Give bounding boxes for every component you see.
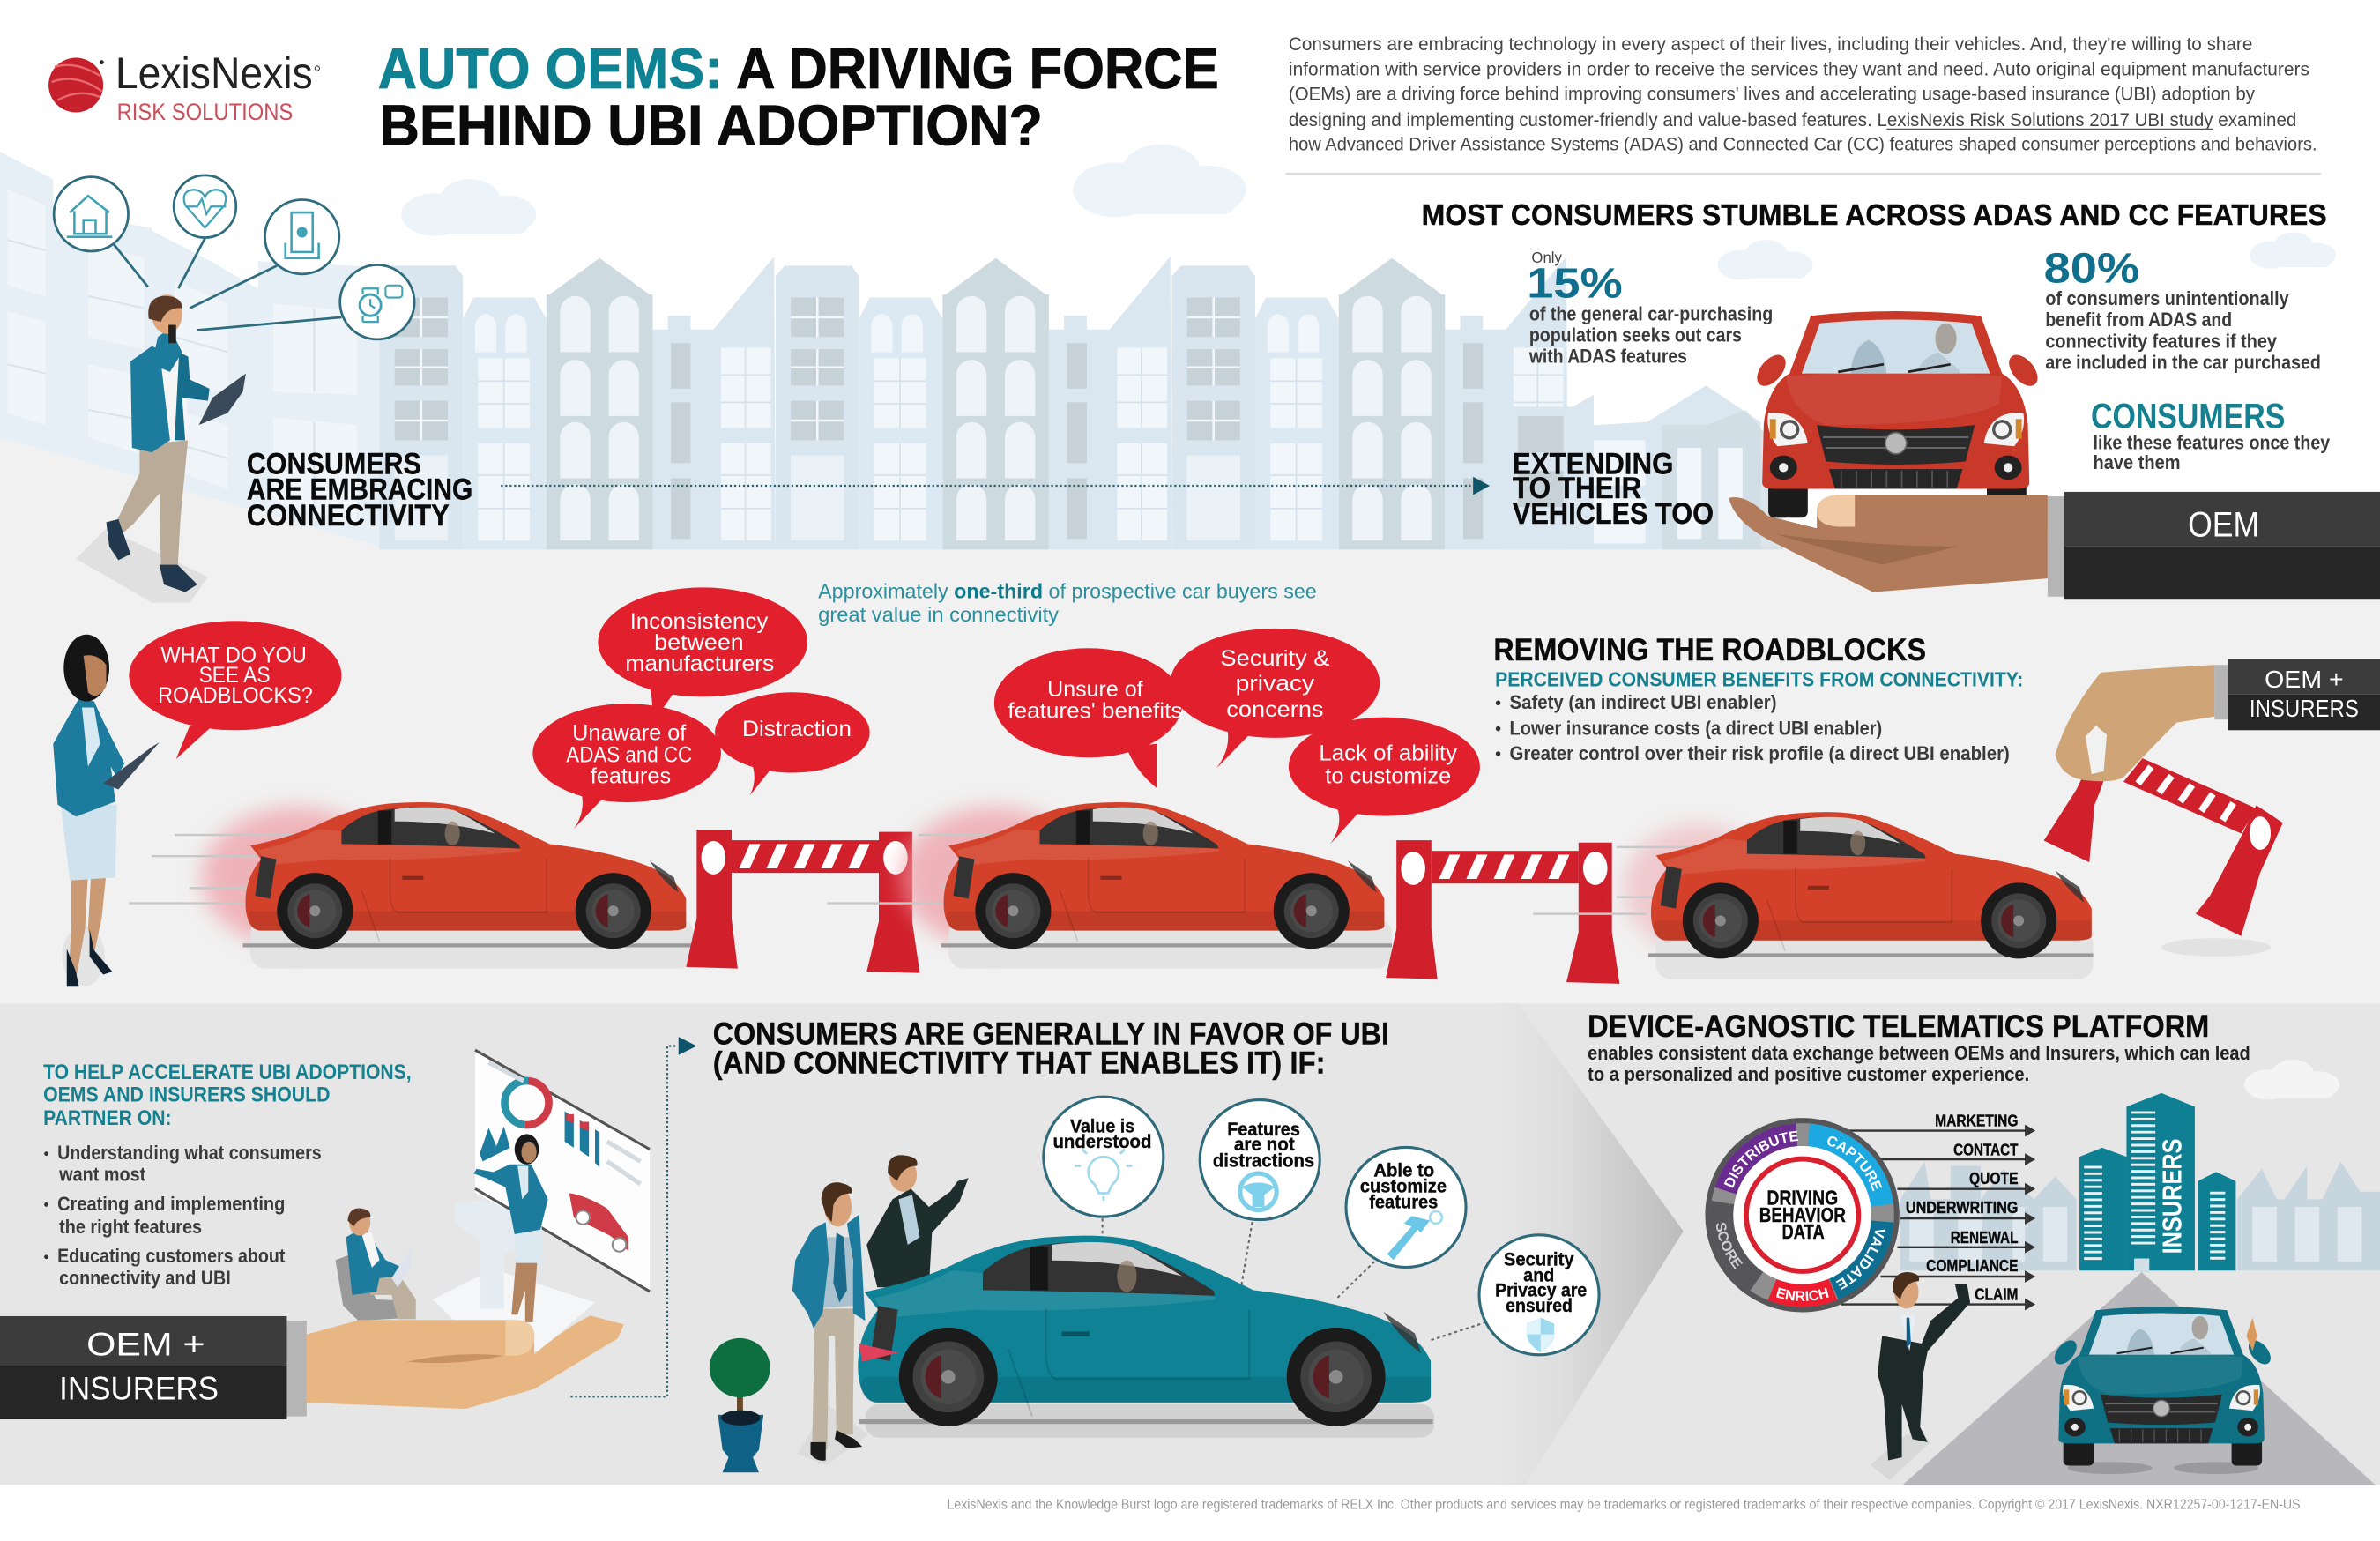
bubble: what do you see as roadblocks: ROADBLOCKS?	[158, 683, 313, 708]
chart: driving behavior data ring: DISTRIBUTE	[1724, 1130, 1798, 1188]
callout: value is understood: understood	[1053, 1131, 1151, 1152]
teal car on road	[2050, 1306, 2275, 1474]
callout: security and privacy ensured: ensured	[1506, 1295, 1573, 1316]
stat: 80 percent: of consumers unintentionally	[2045, 287, 2289, 309]
list: perceived benefits: Lower insurance costs (a direct UBI enabler)	[1509, 717, 1882, 739]
stat: 80 percent: 80%	[2044, 244, 2139, 292]
barrier one	[686, 830, 919, 973]
title: AUTO OEMS:	[378, 37, 723, 100]
list: perceived benefits: Safety (an indirect UBI enabler)	[1509, 691, 1777, 713]
stat: 15 percent	[1527, 249, 1773, 368]
logo: LexisNexis Risk Solutions: RISK SOLUTIONS	[117, 99, 293, 125]
stat: 15 percent: population seeks out cars	[1529, 324, 1742, 346]
output arrows with labels: MARKETING	[1935, 1113, 2018, 1130]
stat: 15 percent: Only	[1531, 249, 1562, 266]
chart: driving behavior data ring: CAPTURE	[1827, 1136, 1883, 1192]
illustration: OEM and insurers hand with text	[0, 1315, 624, 1419]
text: one-third of buyers see value: great value in connectivity	[818, 603, 1059, 626]
bubble: distraction: Distraction	[742, 717, 852, 741]
chart: driving behavior data ring: SCORE	[1715, 1223, 1743, 1269]
output arrows with labels: CONTACT	[1953, 1141, 2018, 1158]
output arrows with labels: COMPLIANCE	[1926, 1257, 2018, 1275]
text: one-third of buyers see value	[818, 579, 1317, 626]
chart: driving behavior data ring: ENRICH	[1775, 1287, 1829, 1301]
label: consumers are embracing connectivity	[247, 447, 472, 532]
intro paragraph	[1289, 33, 2317, 155]
bubble: security and privacy concerns: concerns	[1226, 697, 1324, 722]
bubble: unaware of ADAS and CC features: ADAS and CC	[566, 742, 692, 767]
output arrows with labels: QUOTE	[1969, 1170, 2018, 1187]
text: accelerate UBI adoption partnership: OEMS AND INSURERS SHOULD	[43, 1083, 331, 1106]
stat: consumers like these features	[2091, 398, 2331, 473]
label: consumers are embracing connectivity: CONNECTIVITY	[247, 499, 450, 532]
icon: smart home	[54, 177, 129, 251]
chart: driving behavior data ring: DATA	[1782, 1220, 1825, 1243]
chevron divider	[1495, 1003, 1684, 1485]
callout: able to customize features: customize	[1360, 1176, 1447, 1197]
bubble: security and privacy concerns: Security &	[1220, 646, 1330, 671]
bubble: inconsistency between manufacturers: between	[654, 630, 744, 655]
illustration: presentation screen	[475, 1050, 650, 1292]
illustration: hand lifting barrier: INSURERS	[2250, 695, 2359, 722]
intro paragraph: how Advanced Driver Assistance Systems (ADAS) and Connected Car (CC) features shaped consumer perceptions and behaviors.	[1289, 133, 2317, 155]
callout: security and privacy ensured	[1430, 1235, 1599, 1355]
bubble: unsure of features' benefits	[994, 648, 1182, 788]
illustration: OEM hand holding red car	[1729, 311, 2380, 599]
heading: device-agnostic telematics platform: DEVICE-AGNOSTIC TELEMATICS PLATFORM	[1588, 1009, 2209, 1044]
city skyline	[0, 152, 1783, 549]
bubble: what do you see as roadblocks: SEE AS	[199, 663, 271, 688]
bubble: unsure of features' benefits: Unsure of	[1047, 677, 1143, 702]
label: consumers are embracing connectivity: ARE EMBRACING	[247, 473, 472, 507]
callout: features are not distractions: are not	[1234, 1134, 1295, 1155]
chart: driving behavior data ring	[1705, 1118, 1900, 1312]
bubble: inconsistency between manufacturers: manufacturers	[625, 651, 774, 676]
text: accelerate UBI adoption partnership: the right features	[59, 1216, 202, 1238]
intro paragraph: (OEMs) are a driving force behind improving consumers' lives and accelerating usage-based insurance (UBI) adoption by	[1289, 83, 2255, 105]
bubble: security and privacy concerns: privacy	[1236, 672, 1315, 696]
bubble: security and privacy concerns	[1171, 629, 1380, 768]
stat: 80 percent: are included in the car purchased	[2045, 351, 2321, 373]
bubble: lack of ability to customize: to customize	[1325, 764, 1451, 789]
barrier two	[1386, 840, 1619, 984]
text: one-third of buyers see value: Approximately one-third of prospective car buyers see	[818, 579, 1317, 602]
output arrows with labels	[1841, 1113, 2035, 1310]
callout: features are not distractions: distractions	[1213, 1150, 1314, 1171]
icon: smartphone	[264, 199, 339, 274]
callout: able to customize features	[1337, 1147, 1466, 1298]
callout: able to customize features: Able to	[1373, 1160, 1434, 1181]
dotted arrow to vehicles	[501, 477, 1490, 495]
icon links: connected devices	[54, 175, 414, 339]
stat: 15 percent: with ADAS features	[1528, 346, 1687, 368]
illustration: hand lifting barrier	[2044, 659, 2380, 957]
text: platform description: enables consistent data exchange between OEMs and Insurers, which can lead	[1588, 1042, 2250, 1064]
text: accelerate UBI adoption partnership: want most	[58, 1164, 146, 1186]
potted plant	[710, 1338, 770, 1472]
output arrows with labels: UNDERWRITING	[1906, 1199, 2018, 1217]
stat: 80 percent: connectivity features if they	[2045, 330, 2277, 352]
bubble: unaware of ADAS and CC features: features	[591, 764, 671, 789]
figure: man in back pointing	[866, 1155, 969, 1287]
stat: consumers like these features: CONSUMERS	[2091, 398, 2285, 436]
intro paragraph: designing and implementing customer-friendly and value-based features. LexisNexis Risk Solutions 2017 UBI study examined	[1289, 108, 2296, 130]
list: perceived benefits	[1496, 691, 2010, 764]
callout: value is understood	[1044, 1097, 1164, 1234]
illustration: OEM and insurers hand with text: OEM +	[86, 1326, 205, 1363]
icon: man on phone with tablet	[76, 294, 246, 603]
text: accelerate UBI adoption partnership: TO HELP ACCELERATE UBI ADOPTIONS,	[43, 1061, 412, 1084]
stat: consumers like these features: have them	[2094, 451, 2181, 473]
callout: features are not distractions	[1200, 1100, 1320, 1284]
insurers city background	[1900, 1060, 2380, 1270]
text: accelerate UBI adoption partnership: PARTNER ON:	[43, 1106, 172, 1130]
intro paragraph: information with service providers in order to receive the services they want and need. Auto original equipment manufacturers	[1289, 57, 2309, 79]
output arrows with labels: CLAIM	[1975, 1286, 2018, 1304]
stat: 80 percent: benefit from ADAS and	[2045, 309, 2232, 331]
text: accelerate UBI adoption partnership	[43, 1061, 412, 1289]
callout: security and privacy ensured: Security	[1504, 1248, 1574, 1269]
logo: LexisNexis Risk Solutions: LexisNexis	[115, 48, 313, 98]
title: BEHIND UBI ADOPTION?	[379, 93, 1043, 157]
heading: removing the roadblocks: REMOVING THE ROADBLOCKS	[1493, 633, 1926, 667]
text: platform description	[1588, 1042, 2250, 1085]
stat: 15 percent: 15%	[1527, 260, 1623, 308]
dotted arrow to favor of UBI	[570, 1037, 696, 1396]
heading: consumers in favor of UBI: CONSUMERS ARE GENERALLY IN FAVOR OF UBI	[713, 1017, 1389, 1052]
bubble: what do you see as roadblocks: WHAT DO YOU	[161, 644, 307, 668]
figure: woman with tablet asking about roadblocks	[53, 635, 160, 986]
teal sports car with shadow	[858, 1236, 1434, 1438]
title: A DRIVING FORCE	[736, 37, 1219, 100]
figure: seated man with papers	[336, 1209, 416, 1321]
icon: smartwatch	[340, 265, 414, 339]
logo: LexisNexis Risk Solutions	[48, 48, 319, 125]
callout: value is understood: Value is	[1070, 1116, 1134, 1137]
illustration: floor and podium	[433, 1199, 595, 1351]
figure: presenter woman	[473, 1134, 548, 1322]
text: accelerate UBI adoption partnership: connectivity and UBI	[59, 1267, 231, 1289]
chart: driving behavior data ring: BEHAVIOR	[1759, 1203, 1846, 1226]
label: extending to their vehicles too: EXTENDING	[1513, 447, 1673, 480]
bubble: distraction	[715, 692, 870, 795]
bubble: lack of ability to customize	[1289, 718, 1480, 844]
figure: businessman presenting	[1870, 1272, 1970, 1480]
road to insurers	[1903, 1272, 2375, 1485]
heading: consumers in favor of UBI	[713, 1017, 1389, 1080]
insurers towers: INSURERS	[2158, 1138, 2187, 1254]
stat: 80 percent	[2044, 244, 2321, 373]
text: platform description: to a personalized and positive customer experience.	[1588, 1063, 2029, 1085]
label: extending to their vehicles too: VEHICLES TOO	[1513, 497, 1714, 531]
bubble: unsure of features' benefits: features' benefits	[1008, 699, 1182, 724]
chart: driving behavior data ring: VALIDATE	[1835, 1229, 1885, 1291]
bubble: what do you see as roadblocks	[129, 621, 341, 759]
bubble: unaware of ADAS and CC features	[532, 704, 721, 829]
bubble: inconsistency between manufacturers: Inconsistency	[630, 609, 769, 634]
callout: able to customize features: features	[1369, 1191, 1438, 1212]
bubble: lack of ability to customize: Lack of ability	[1319, 741, 1458, 766]
illustration: OEM and insurers hand with text: INSURERS	[59, 1370, 219, 1407]
callout: security and privacy ensured: and	[1523, 1264, 1554, 1285]
heading: consumers in favor of UBI: (AND CONNECTIVITY THAT ENABLES IT) IF:	[713, 1046, 1326, 1080]
insurers towers	[2079, 1093, 2235, 1272]
stat: consumers like these features: like these features once they	[2094, 432, 2331, 454]
callout: security and privacy ensured: Privacy are	[1495, 1280, 1587, 1301]
text: accelerate UBI adoption partnership: Understanding what consumers	[57, 1142, 322, 1164]
output arrows with labels: RENEWAL	[1951, 1229, 2018, 1247]
title	[378, 37, 1219, 157]
figure: man in front in blue jacket	[792, 1182, 868, 1465]
bubble: unaware of ADAS and CC features: Unaware of	[572, 720, 686, 745]
text: accelerate UBI adoption partnership: Educating customers about	[57, 1245, 286, 1267]
illustration: hand lifting barrier: OEM +	[2265, 666, 2344, 693]
text: accelerate UBI adoption partnership: Creating and implementing	[57, 1193, 285, 1215]
bubble: inconsistency between manufacturers	[598, 587, 807, 729]
intro paragraph: Consumers are embracing technology in every aspect of their lives, including their vehicles. And, they're willing to share	[1289, 33, 2252, 55]
stat: 15 percent: of the general car-purchasing	[1529, 302, 1773, 324]
background clouds	[401, 145, 2336, 280]
label: consumers are embracing connectivity: CONSUMERS	[247, 447, 421, 480]
subheading: perceived consumer benefits: PERCEIVED CONSUMER BENEFITS FROM CONNECTIVITY:	[1495, 667, 2023, 690]
chart: driving behavior data ring: DRIVING	[1766, 1186, 1838, 1209]
illustration: OEM hand holding red car: OEM	[2188, 506, 2259, 545]
panel: bottom section background	[0, 1003, 2380, 1485]
label: extending to their vehicles too	[1513, 447, 1714, 531]
red car one with motion blur	[129, 802, 694, 969]
list: perceived benefits: Greater control over their risk profile (a direct UBI enabler)	[1509, 742, 2010, 764]
panel: ground band of middle section	[0, 437, 2380, 1003]
red car three passing removed barrier	[1533, 812, 2094, 979]
heading: most consumers stumble: MOST CONSUMERS STUMBLE ACROSS ADAS AND CC FEATURES	[1422, 199, 2327, 232]
callout: features are not distractions: Features	[1227, 1119, 1300, 1140]
red car two with motion blur	[827, 802, 1392, 969]
label: extending to their vehicles too: TO THEIR	[1513, 472, 1641, 505]
icon: heart	[174, 175, 236, 238]
